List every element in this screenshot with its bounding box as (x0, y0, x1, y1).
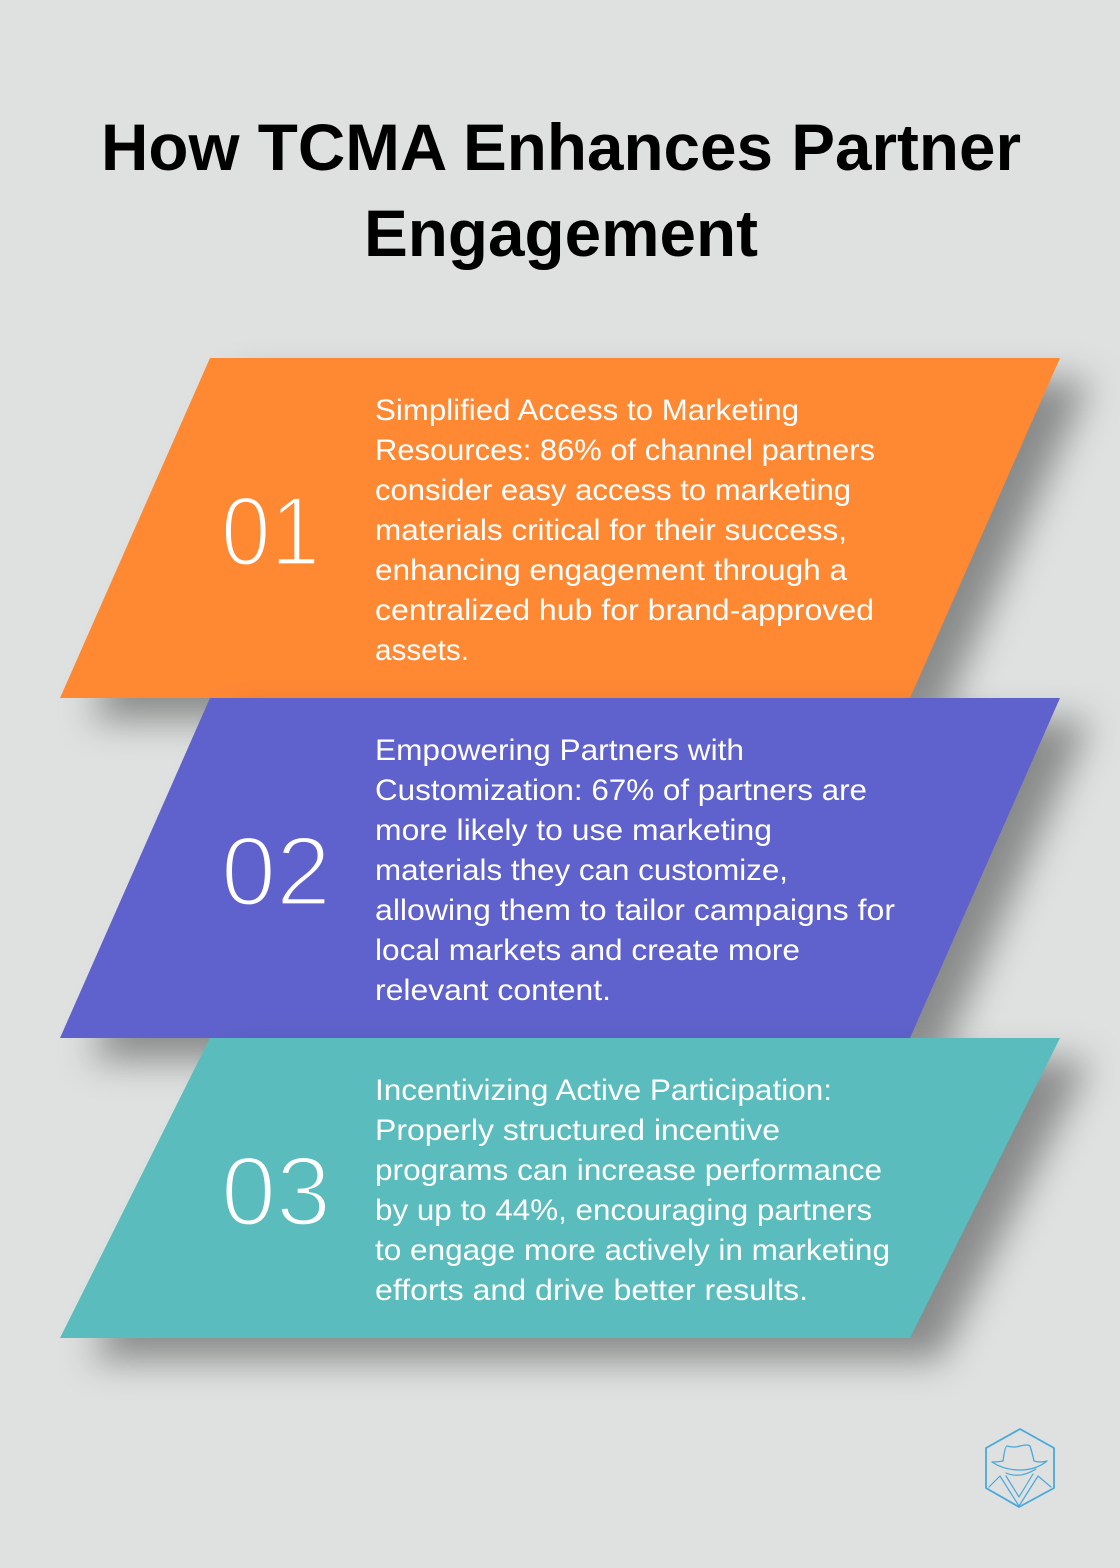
step 01 text: Simplified Access to Marketing (375, 394, 799, 427)
orange parallelogram (60, 358, 1060, 698)
step 03 text: by up to 44%, encouraging partners (375, 1194, 872, 1227)
step 03 text: to engage more actively in marketing (375, 1234, 890, 1267)
number 03: 03 (221, 1136, 331, 1246)
step 03 text: efforts and drive better results. (375, 1274, 808, 1307)
step 01 text: materials critical for their success, (375, 514, 847, 547)
step 03 text: Incentivizing Active Participation: (375, 1074, 832, 1107)
step 01 text: Resources: 86% of channel partners (375, 434, 875, 467)
step 02 text: materials they can customize, (375, 854, 788, 887)
title: How TCMA Enhances Partner (101, 110, 1021, 184)
panel: step 03 incentives (60, 1038, 1090, 1360)
step 03 text: programs can increase performance (375, 1154, 882, 1187)
teal parallelogram (60, 1038, 1060, 1338)
title: Engagement (364, 196, 758, 270)
purple parallelogram (60, 698, 1060, 1038)
step 02 text: local markets and create more (375, 934, 800, 967)
step 01 text (375, 394, 875, 667)
number 02: 02 (221, 816, 331, 926)
icon: spy logo hexagon (986, 1429, 1054, 1507)
title (101, 110, 1021, 270)
number 01: 01 (221, 476, 320, 586)
step 01 text: consider easy access to marketing (375, 474, 851, 507)
panel: step 02 customization (60, 698, 1090, 1060)
step 02 text: more likely to use marketing (375, 814, 772, 847)
step 02 text: Empowering Partners with (375, 734, 744, 767)
panel: step 01 simplified access (60, 358, 1090, 720)
step 02 text (375, 734, 895, 1007)
step 02 text: Customization: 67% of partners are (375, 774, 867, 807)
step 01 text: centralized hub for brand-approved (375, 594, 874, 627)
step 03 text (375, 1074, 890, 1307)
step 01 text: enhancing engagement through a (375, 554, 847, 587)
step 03 text: Properly structured incentive (375, 1114, 780, 1147)
step 02 text: relevant content. (375, 974, 611, 1007)
step 02 text: allowing them to tailor campaigns for (375, 894, 895, 927)
step 01 text: assets. (375, 634, 469, 667)
